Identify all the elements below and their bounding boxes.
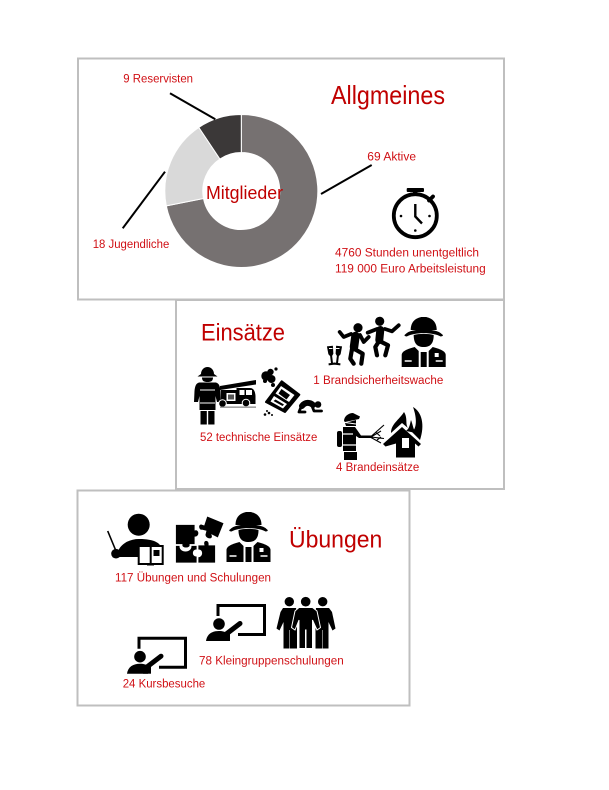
heading: Einsätze: Einsätze (201, 320, 285, 347)
icon: smoke and debris (261, 367, 278, 416)
label: 18 Jugendliche: 18 Jugendliche (93, 239, 169, 251)
icon: firefighter bust (226, 512, 270, 562)
icon: dancing person left (340, 323, 369, 364)
label: 9 Reservisten: 9 Reservisten (123, 74, 193, 86)
icon: stopwatch (394, 188, 437, 237)
icon: instructor with book (108, 514, 163, 566)
panel: Allgmeines (78, 58, 504, 300)
icon: puzzle pieces (176, 516, 224, 563)
text: hours volunteered: 4760 Stunden unentgeltlich (335, 248, 479, 260)
icon: fire truck (219, 380, 256, 408)
segment: 18 Jugendliche (165, 127, 220, 206)
heading: Allgmeines: Allgmeines (331, 80, 445, 110)
panel: Einsätze (176, 300, 504, 489)
label: 4 Brandeinsätze: 4 Brandeinsätze (336, 462, 419, 474)
chart center label: Mitglieder (206, 183, 283, 203)
segment: 9 Reservisten (199, 114, 241, 159)
label: 52 technische Einsätze: 52 technische Einsätze (200, 432, 317, 444)
icon: firefighter bust (402, 317, 446, 367)
label: 24 Kursbesuche: 24 Kursbesuche (123, 678, 205, 690)
leader line: Reservisten (170, 93, 215, 119)
label: 1 Brandsicherheitswache: 1 Brandsicherheitswache (313, 375, 443, 387)
icon: burning house (383, 407, 422, 458)
label: 78 Kleingruppenschulungen: 78 Kleingruppenschulungen (199, 656, 344, 668)
icon: presenter at board, course (127, 638, 186, 674)
text: work value: 119 000 Euro Arbeitsleistung (335, 264, 486, 276)
leader line: Aktive (321, 165, 372, 194)
heading: Übungen: Übungen (289, 526, 382, 553)
label: 69 Aktive: 69 Aktive (367, 152, 416, 164)
icon: champagne glasses (326, 346, 343, 365)
icon: overturned car (266, 381, 299, 412)
icon: group of three people (276, 597, 336, 648)
icon: water spray (371, 425, 384, 443)
icon: firefighter standing (194, 367, 221, 424)
icon: injured person crawling (299, 401, 322, 412)
donut chart: Mitglieder (165, 114, 318, 267)
icon: dancing person right (368, 317, 399, 355)
panel: Übungen (78, 490, 410, 706)
icon: firefighter with hose (337, 413, 372, 460)
segment: 69 Aktive (166, 114, 318, 267)
icon: presenter at board (206, 606, 264, 641)
leader line: Jugendliche (123, 172, 165, 228)
label: 117 Übungen und Schulungen: 117 Übungen und Schulungen (115, 573, 271, 585)
